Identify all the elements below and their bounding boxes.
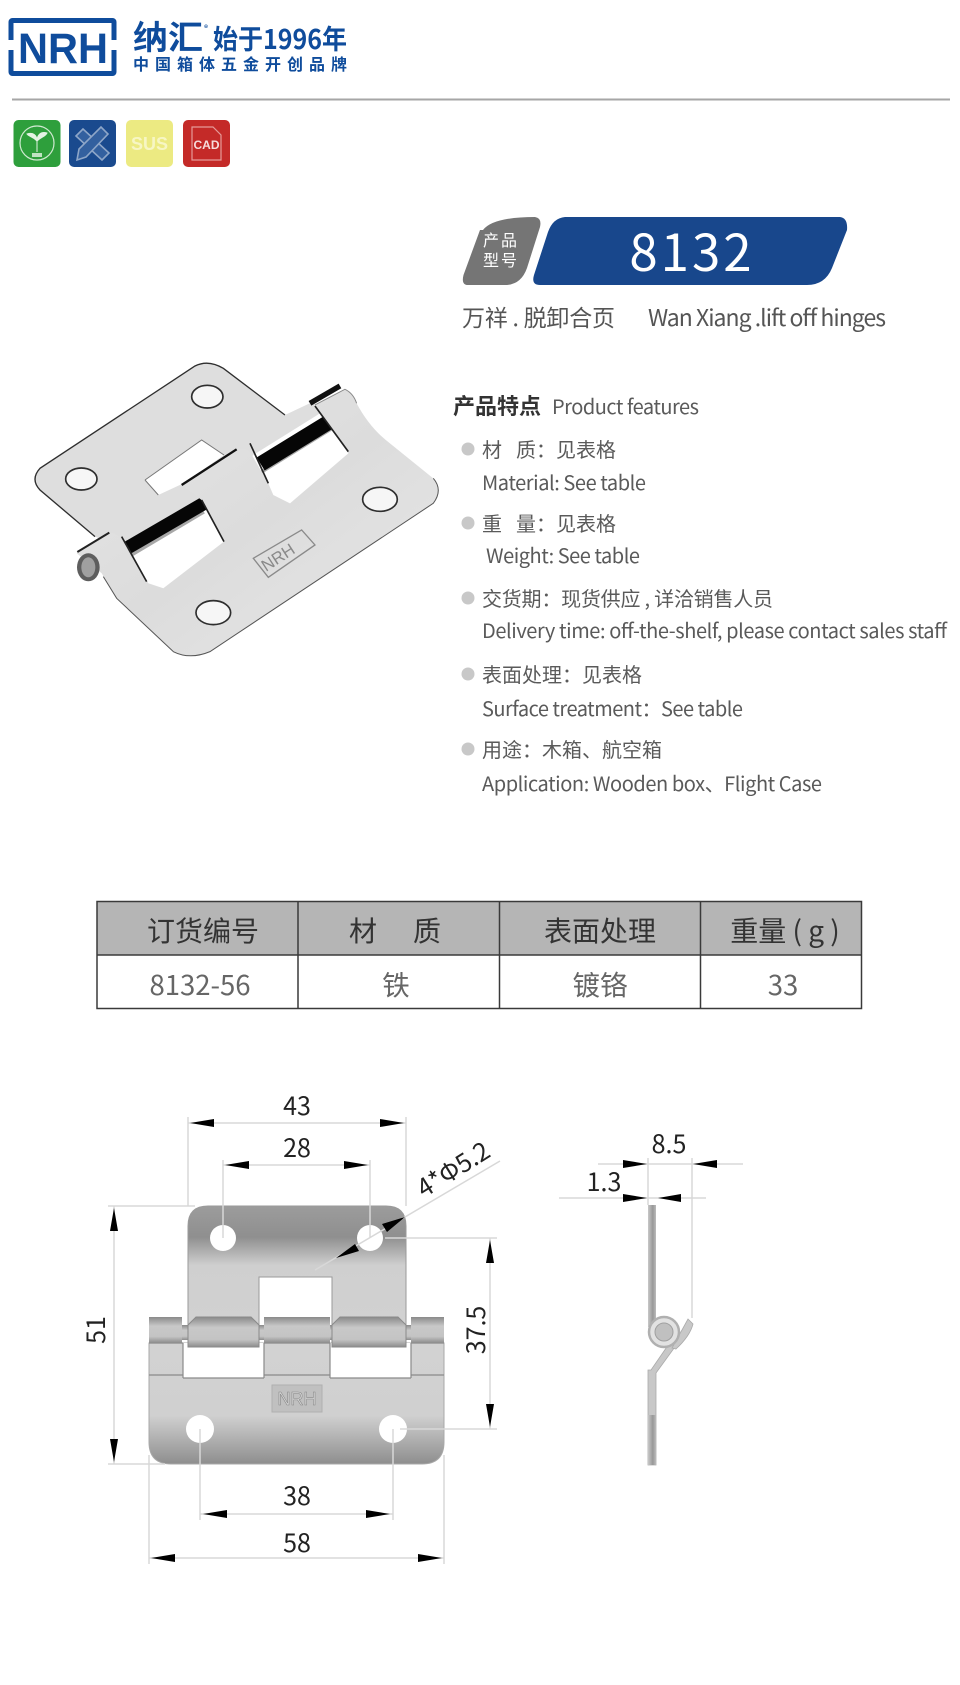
dimension labels: front view: 38 [283, 1477, 311, 1513]
feature: surface treatment: Surface treatment：See table [482, 693, 743, 722]
brand slogan: ® [204, 23, 208, 34]
feature: application [462, 734, 822, 797]
dimension labels: front view: 58 [283, 1524, 311, 1560]
dimension labels: front view: 4*Φ5.2 [409, 1132, 496, 1205]
features heading: Product features [552, 391, 699, 420]
feature: material: Material: See table [482, 467, 646, 496]
logo: NRH: NRH [18, 25, 108, 73]
dimension labels: front view: 28 [283, 1129, 311, 1165]
brand slogan: 始于1996年 [213, 18, 347, 57]
icon: SUS: SUS [131, 134, 168, 154]
dimension labels: front view: 37.5 [457, 1306, 493, 1354]
feature: application: Application: Wooden box、Flight Case [482, 768, 822, 797]
order table [97, 901, 862, 1008]
product photo: hinge: NRH [258, 540, 298, 575]
order table: 材 [349, 910, 377, 950]
feature: weight: Weight: See table [486, 540, 640, 569]
feature: application: 用途：木箱、航空箱 [482, 734, 662, 763]
feature: material [462, 434, 646, 496]
product photo: hinge [35, 363, 438, 656]
brand slogan [133, 11, 347, 75]
product name: 万祥 . 脱卸合页 [462, 299, 615, 333]
product model label: 产品 [483, 227, 519, 251]
product model number [533, 212, 847, 286]
order table: 质 [413, 910, 441, 950]
icon: CAD: CAD [194, 138, 220, 152]
dimension lines: side view [559, 1125, 743, 1318]
brand slogan: 纳汇 [133, 11, 203, 59]
icon: CAD [183, 120, 230, 167]
icon: tools [69, 120, 116, 167]
side view drawing [648, 1205, 693, 1465]
feature: weight: 重 [482, 508, 502, 537]
features heading [453, 389, 699, 421]
front view drawing: hinge [149, 1206, 444, 1464]
product name: Wan Xiang .lift off hinges [648, 299, 886, 333]
feature: weight: 量：见表格 [516, 508, 616, 537]
features heading: 产品特点 [453, 389, 541, 421]
dimension labels: front view: 43 [283, 1087, 311, 1123]
feature: material: 质：见表格 [516, 434, 616, 463]
dimension labels: front view [77, 1087, 496, 1560]
brand slogan: 中国箱体五金开创品牌 [133, 51, 347, 75]
icon: eco [14, 120, 60, 167]
feature: surface treatment [462, 659, 743, 722]
front view drawing: hinge: NRH [278, 1389, 316, 1409]
dimension lines: front view [108, 1117, 500, 1564]
product model label [463, 217, 540, 285]
product model number: 8132 [629, 212, 755, 286]
order table: 33 [768, 963, 798, 1003]
order table: 铁 [382, 963, 410, 1003]
feature: surface treatment: 表面处理：见表格 [482, 659, 642, 688]
feature: material: 材 [482, 434, 502, 463]
order table: 镀铬 [572, 963, 628, 1003]
product model label: 型号 [483, 247, 519, 271]
feature: delivery time [462, 583, 948, 644]
order table: 订货编号 [147, 910, 259, 950]
feature: weight [462, 508, 640, 569]
dimension lines: side view: 1.3 [587, 1163, 621, 1199]
product name [462, 299, 886, 333]
feature: delivery time: Delivery time: off-the-shelf, please contact sales staff [482, 615, 948, 644]
dimension labels: front view: 51 [77, 1316, 113, 1344]
order table: 重量 ( g ) [730, 910, 840, 950]
order table: 8132-56 [149, 963, 251, 1003]
dimension lines: side view: 8.5 [652, 1125, 686, 1161]
feature: delivery time: 交货期：现货供应 , 详洽销售人员 [482, 583, 773, 612]
order table: 表面处理 [544, 910, 656, 950]
icon: SUS [126, 120, 173, 167]
